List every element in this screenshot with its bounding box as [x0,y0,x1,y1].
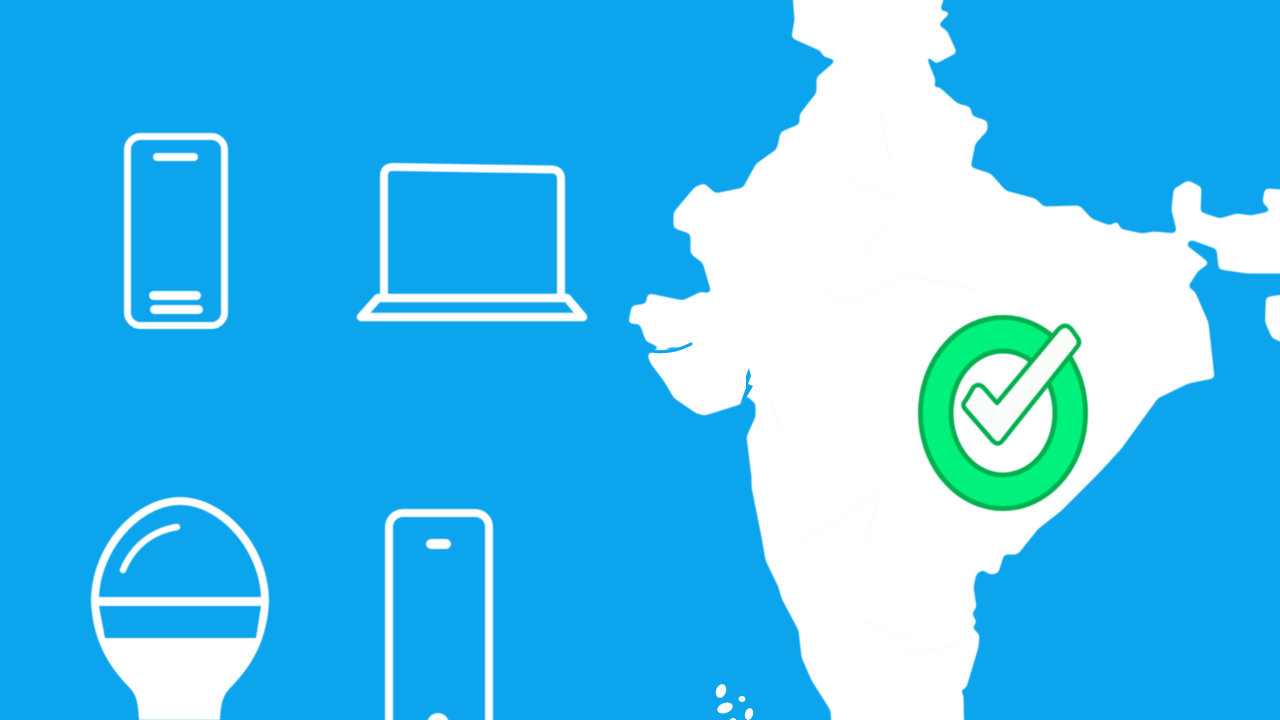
icon: light bulb [91,497,269,720]
icon: laptop [361,167,583,317]
map of India [630,0,1280,720]
icon: smartphone [128,136,224,326]
icon: mobile phone, cropped [389,513,489,720]
icon: green check badge [920,318,1086,508]
